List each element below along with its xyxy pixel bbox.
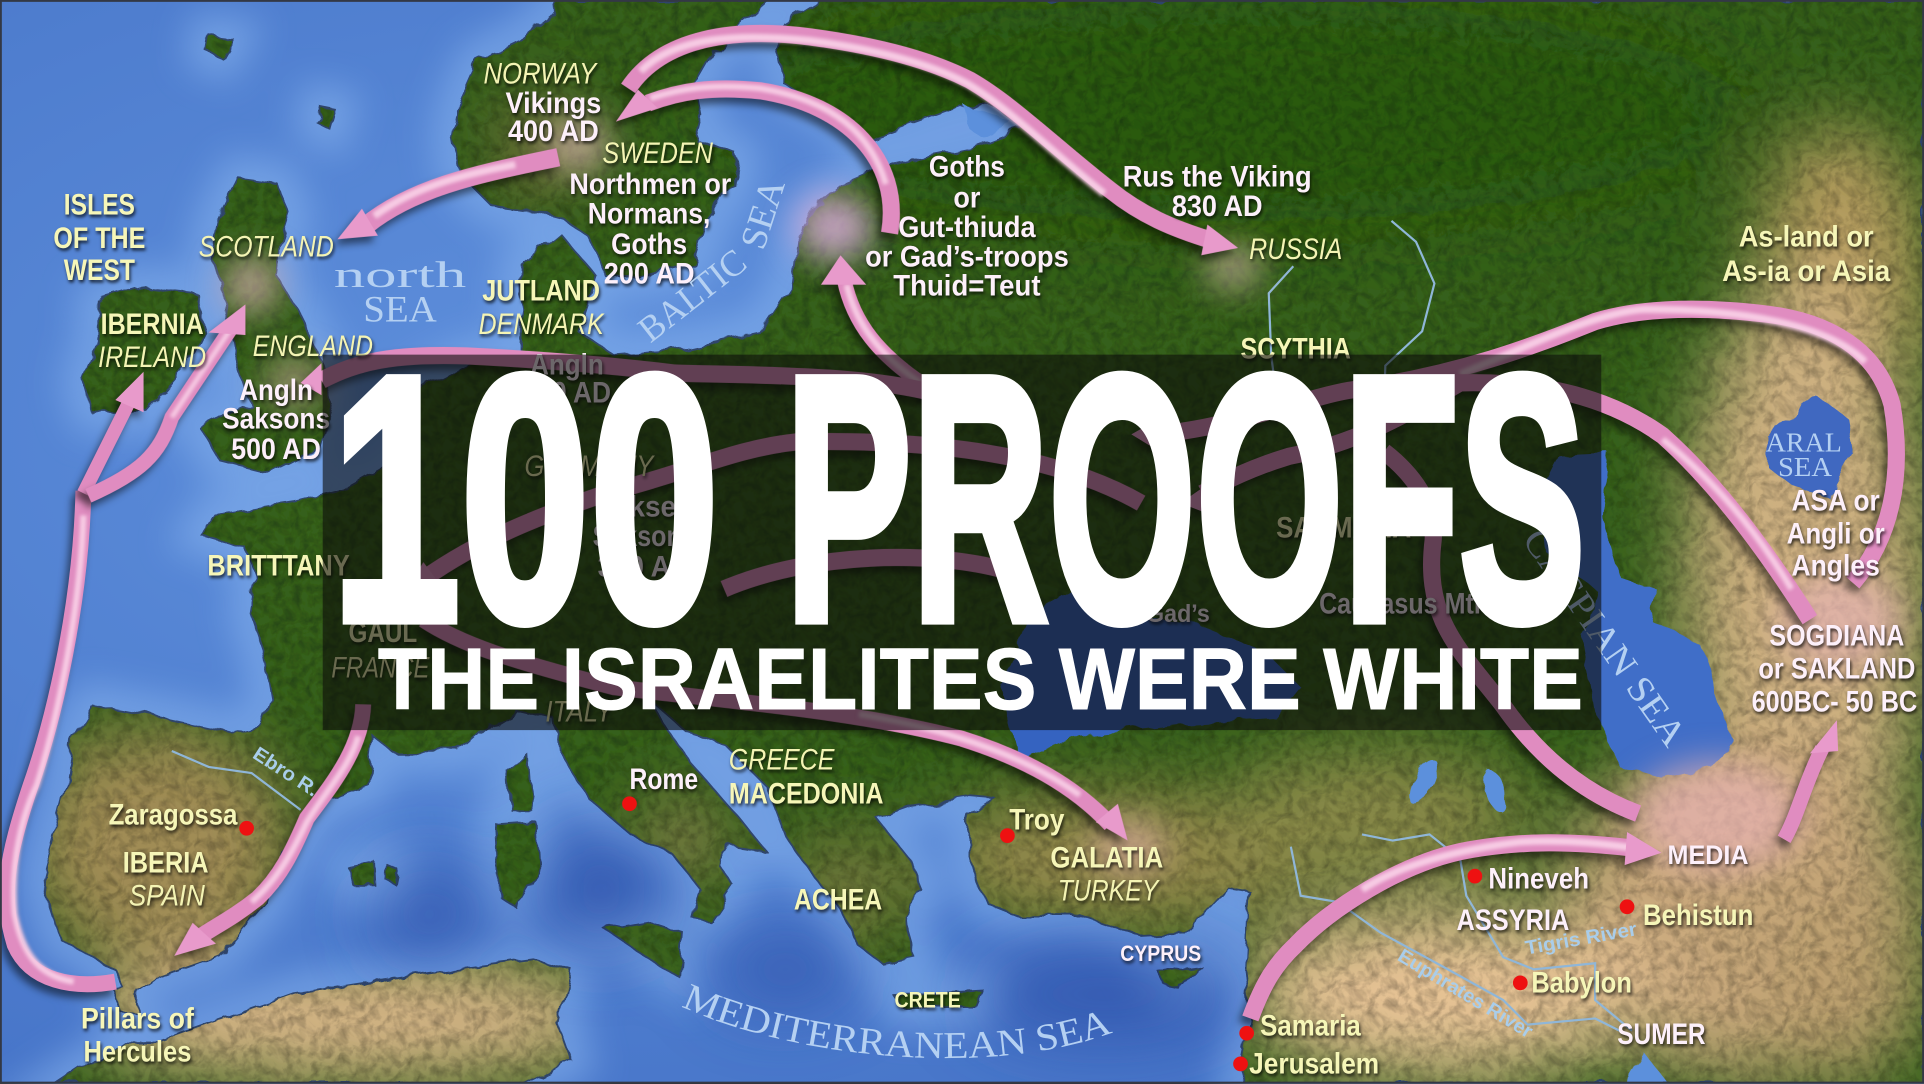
label: Scotland: SCOTLAND (199, 230, 334, 263)
label: Brittany: BRITTTANY (207, 549, 350, 582)
label: Media: MEDIA (1668, 840, 1749, 870)
arrow: Scythia eastern arc (1131, 309, 1896, 583)
label: Troy: Troy (1009, 803, 1065, 836)
label: Greece: GREECE (729, 743, 835, 776)
map labels: Caucasus Mtns (1319, 588, 1503, 621)
label: Sarmatia and Caucasus: SARMATIA (1276, 511, 1411, 544)
arrow: to France (724, 557, 1006, 589)
map labels: Goths (611, 228, 687, 261)
label: Goths: Goths (929, 151, 1005, 184)
label: Baltic Sea: BALTIC (630, 241, 754, 350)
label: Crete: CRETE (895, 987, 961, 1012)
label: Norway: NORWAY (483, 57, 598, 90)
arrow: to Ireland (83, 372, 144, 493)
label: Galatia: GALATIA (1050, 842, 1163, 875)
label: Russia: RUSSIA (1249, 233, 1342, 266)
arrow: Europe to Galatia (423, 620, 1128, 841)
map labels: OF THE (53, 222, 145, 255)
main title (331, 304, 1585, 695)
label: Scythia: SCYTHIA (1241, 332, 1351, 365)
small lakes and persian gulf (962, 103, 1669, 1083)
map labels: Angles (1791, 549, 1880, 582)
inland seas (962, 103, 1853, 1083)
arrow: into Goth lands (821, 255, 933, 390)
label: Sumer: SUMER (1617, 1018, 1706, 1051)
map labels: As-ia or Asia (1722, 255, 1891, 288)
red city markers (239, 796, 1634, 1071)
arrow: to Scotland (88, 304, 245, 496)
rivers (172, 221, 1632, 1037)
map labels: WEST (64, 254, 135, 287)
label: Sogdiana: SOGDIANA (1769, 619, 1904, 652)
label: Ireland: IBERNIA (101, 308, 204, 341)
label: Babylon: Babylon (1531, 967, 1632, 1000)
location glows (222, 118, 1902, 874)
map labels: Saksons (593, 520, 696, 553)
map labels: 500 AD (523, 376, 611, 409)
label: Germany: Angln (530, 348, 604, 381)
label: Gaul: GAUL (348, 616, 417, 649)
arrow: Media to Sogdiana (1784, 720, 1838, 839)
label: Jerusalem: Jerusalem (1249, 1048, 1379, 1081)
label: Asia: As-land or (1739, 221, 1874, 254)
map labels: Vikings (506, 87, 601, 120)
map labels: or Gad’s-troops (865, 240, 1069, 273)
label: Isles of the West: ISLES (64, 189, 135, 222)
label: England: ENGLAND (253, 330, 373, 363)
map labels: Northmen or (569, 168, 732, 201)
map labels: 300 AD (598, 551, 691, 584)
label: Iberia: IBERIA (123, 846, 209, 879)
label: North Sea: north (334, 254, 466, 295)
map labels: SPAIN (129, 880, 206, 913)
arrow: Samaria to Media (1250, 832, 1661, 1018)
arrow: Atlantic loop from Gibraltar (7, 491, 115, 984)
black sea (1000, 577, 1301, 761)
label: Jutland: JUTLAND (482, 275, 600, 308)
map labels: FRANCE (331, 651, 430, 684)
label: Cyprus: CYPRUS (1120, 941, 1201, 966)
label: Samaria: Samaria (1260, 1010, 1361, 1043)
map labels: Gad’s (1146, 601, 1210, 628)
arrow: Media to Scythia (1384, 452, 1638, 814)
label: Achea: ACHEA (794, 883, 882, 916)
map labels: 200 AD (604, 257, 695, 290)
map labels: Saksons (222, 402, 330, 435)
map labels: or (953, 181, 981, 214)
label: Ebro River: Ebro R. (249, 743, 323, 801)
label: Rus the Viking: Rus the Viking (1123, 161, 1312, 194)
sea and river names: SEA (1778, 452, 1833, 482)
arrow: across Europe to England (301, 355, 933, 395)
subtitle: THE ISRAELITES WERE WHITE (378, 631, 1583, 728)
label: Pillars of Hercules: Pillars of (81, 1002, 194, 1035)
map labels: Gut-thiuda (898, 211, 1036, 244)
sea and river names: MEDITERRANEAN SEA (682, 984, 1113, 1058)
label: Assyria: ASSYRIA (1456, 904, 1569, 937)
map labels: DENMARK (479, 308, 605, 341)
label: Rome: Rome (629, 763, 698, 796)
label: Behistun: Behistun (1643, 899, 1753, 932)
map labels: Hercules (83, 1035, 191, 1068)
label: Tigris River: Tigris River (1523, 918, 1639, 960)
map labels: Angln (239, 374, 313, 407)
map labels: Thuid=Teut (893, 270, 1041, 303)
map labels: TURKEY (1058, 875, 1160, 908)
map labels: 500 AD (231, 433, 321, 466)
map labels: MACEDONIA (729, 778, 883, 811)
sea and river names: SEA (732, 173, 793, 254)
title number: 100: 100 (331, 304, 719, 695)
label: Euphrates River: Euphrates River (1394, 945, 1537, 1043)
label: Sweden: SWEDEN (602, 137, 714, 170)
label: Caspian Sea: CASPIAN SEA (1515, 521, 1695, 754)
label: Mediterranean Sea (681, 1006, 1110, 1058)
arrow: to Germany (405, 441, 1141, 593)
dark title backdrop (323, 355, 1601, 730)
label: Aral Sea: ARAL (1766, 428, 1842, 458)
map labels: 830 AD (1172, 190, 1263, 223)
aral sea (1767, 395, 1853, 497)
arrow: Sogdiana north-west (1180, 383, 1810, 620)
label: Nineveh: Nineveh (1488, 862, 1589, 895)
sea and river names (249, 173, 1882, 1058)
arrow: through Gaul to Spain (174, 704, 363, 956)
arrow: Goths to Norway (616, 86, 891, 233)
map labels: Angli or (1787, 518, 1885, 551)
arrow: Norway to Scotland (337, 157, 558, 239)
label: Asa or Angli: ASA or (1791, 484, 1880, 517)
arrow: Norway to Russia (628, 33, 1238, 255)
map labels: 400 AD (508, 115, 599, 148)
map labels: GERMANY (525, 450, 655, 483)
label: Italy: ITALY (545, 696, 615, 729)
map labels: IRELAND (98, 341, 206, 374)
label: Zaragossa: Zaragossa (109, 799, 238, 832)
sea and river names: SEA (363, 289, 437, 330)
map labels: Saksen (595, 491, 693, 524)
map labels: Normans, (588, 197, 710, 230)
deep sea shading (374, 828, 1239, 1041)
caspian sea (1540, 452, 1730, 779)
